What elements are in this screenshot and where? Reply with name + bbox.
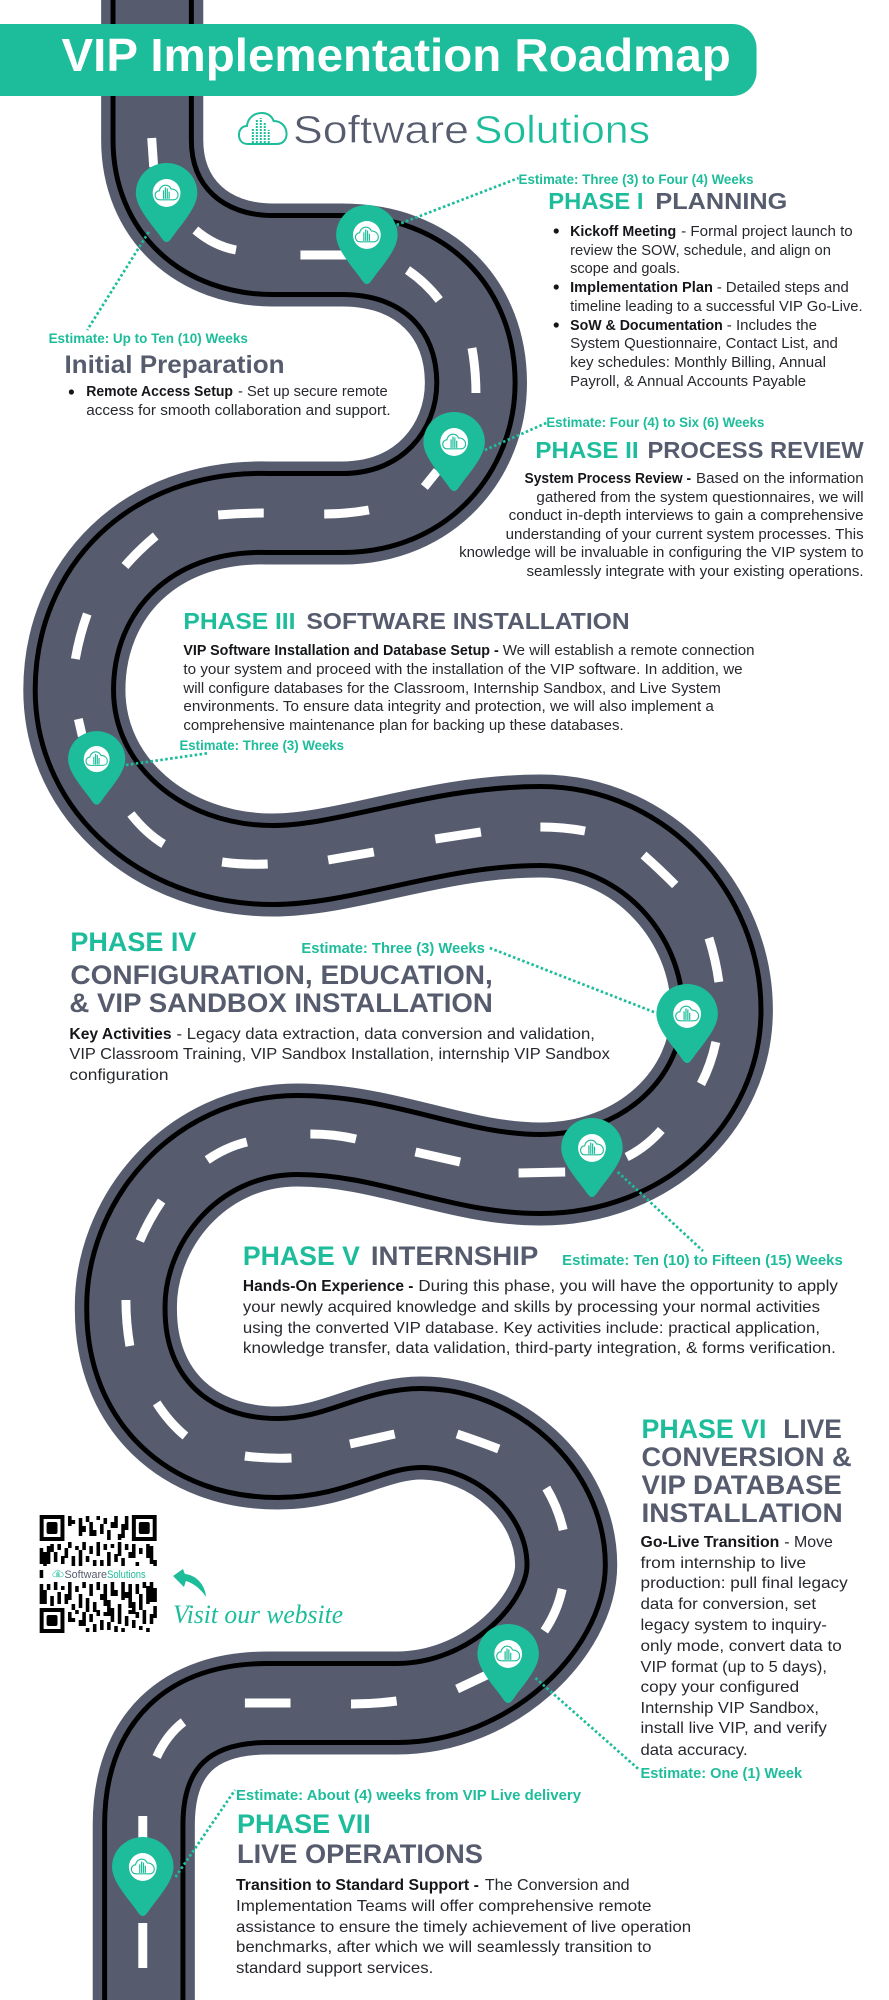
heading: phase VI: CONVERSION & <box>642 1442 852 1472</box>
initial preparation bullet <box>69 383 391 419</box>
map pin 7 <box>477 1624 539 1703</box>
phase IV body text: VIP Classroom Training, VIP Sandbox Installation, internship VIP Sandbox <box>69 1046 610 1063</box>
heading: phase I: PLANNING <box>655 188 787 214</box>
map pin 6 <box>561 1118 623 1197</box>
estimate: phase II: Estimate: Four (4) to Six (6) Weeks <box>546 414 765 430</box>
heading: phase VII: LIVE OPERATIONS <box>237 1839 483 1869</box>
phase VI body text: data accuracy. <box>641 1742 748 1759</box>
heading: phase VI: LIVE <box>783 1414 842 1444</box>
phase VI body text: from internship to live <box>641 1555 806 1572</box>
phase V body text: knowledge transfer, data validation, third-party integration, & forms verification. <box>243 1340 836 1357</box>
estimate: initial preparation: Estimate: Up to Ten (10) Weeks <box>49 330 248 346</box>
phase II body text <box>459 470 864 580</box>
map pin 3 <box>423 412 485 491</box>
phase I bullet list: Kickoff Meeting <box>570 223 676 240</box>
phase VI body text: production: pull final legacy <box>641 1575 848 1592</box>
phase I bullet list: System Questionnaire, Contact List, and <box>570 335 838 352</box>
phase IV body text: configuration <box>69 1067 169 1084</box>
phase I bullet list: key schedules: Monthly Billing, Annual <box>570 354 826 371</box>
heading: phase III: SOFTWARE INSTALLATION <box>306 608 630 634</box>
heading: phase I <box>548 188 787 214</box>
phase V body text: using the converted VIP database. Key activities include: practical application, <box>243 1320 820 1337</box>
panel: phase IV configuration <box>69 927 610 1084</box>
arrow: points to QR code <box>173 1569 206 1597</box>
phase I bullet list: - Formal project launch to <box>681 223 853 240</box>
estimate: phase III: Estimate: Three (3) Weeks <box>179 737 344 753</box>
map pin 2 <box>336 205 398 284</box>
logo: Software Solutions <box>239 109 650 152</box>
phase I bullet list: - Includes the <box>727 317 817 334</box>
panel: phase VI live conversion <box>641 1414 852 1782</box>
QR code: Solutions <box>107 1569 146 1581</box>
phase V body text: your newly acquired knowledge and skills by processing your normal activities <box>243 1299 820 1316</box>
estimate: phase IV: Estimate: Three (3) Weeks <box>301 940 485 957</box>
title banner <box>0 24 757 96</box>
heading: phase VI: PHASE VI <box>642 1414 766 1444</box>
heading: phase I: PHASE I <box>548 188 643 214</box>
phase VI body text: only mode, convert data to <box>641 1638 842 1655</box>
map pin 5 <box>656 984 718 1063</box>
map pin 8 <box>112 1837 174 1916</box>
logo: Software Solutions: Solutions <box>474 109 650 152</box>
phase I bullet list: scope and goals. <box>570 260 680 277</box>
phase I bullet list: timeline leading to a successful VIP Go-Live. <box>570 298 863 315</box>
road <box>74 0 722 2000</box>
heading: phase IV: & VIP SANDBOX INSTALLATION <box>69 988 493 1018</box>
heading: phase II <box>535 437 864 463</box>
panel: phase V internship <box>243 1241 843 1357</box>
initial preparation bullet: access for smooth collaboration and support. <box>86 402 391 419</box>
phase VII body text: assistance to ensure the timely achievement of live operation <box>236 1919 691 1936</box>
phase I bullet list: SoW & Documentation <box>570 317 723 334</box>
phase VI body text: Go-Live Transition <box>641 1534 779 1551</box>
phase VI body text: - Move <box>784 1534 833 1551</box>
panel: phase VII live operations <box>236 1787 691 1977</box>
phase I bullet list <box>554 223 863 390</box>
heading: phase VII: PHASE VII <box>237 1809 371 1839</box>
phase III body text: to your system and proceed with the installation of the VIP software. In addition, we <box>183 661 743 678</box>
QR code <box>40 1515 157 1633</box>
heading: phase VI: VIP DATABASE <box>642 1470 842 1500</box>
phase VI body text: Internship VIP Sandbox, <box>641 1700 819 1717</box>
phase I bullet list: - Detailed steps and <box>717 279 849 296</box>
heading: phase III <box>183 608 630 634</box>
phase V body text: Hands-On Experience - <box>243 1278 413 1295</box>
logo: Software Solutions: Software <box>293 109 469 152</box>
heading: phase V: PHASE V <box>243 1241 360 1271</box>
phase VII body text <box>236 1877 691 1977</box>
panel: phase I planning <box>519 171 863 390</box>
phase VI body text: copy your configured <box>641 1679 799 1696</box>
phase IV body text: - Legacy data extraction, data conversion and validation, <box>176 1026 595 1043</box>
initial preparation bullet: Remote Access Setup <box>86 383 233 400</box>
phase VII body text: Transition to Standard Support - <box>236 1877 479 1894</box>
phase VI body text: VIP format (up to 5 days), <box>641 1659 827 1676</box>
heading: phase VII <box>237 1809 483 1869</box>
phase III body text: We will establish a remote connection <box>503 642 755 659</box>
phase IV body text: Key Activities <box>69 1026 172 1043</box>
title banner: VIP Implementation Roadmap <box>61 30 731 81</box>
estimate: phase V: Estimate: Ten (10) to Fifteen (15) Weeks <box>562 1252 843 1269</box>
phase VI body text: install live VIP, and verify <box>641 1720 827 1737</box>
phase III body text: VIP Software Installation and Database Setup - <box>183 642 499 659</box>
estimate: phase VII: Estimate: About (4) weeks from VIP Live delivery <box>236 1787 582 1804</box>
heading: phase V <box>243 1241 538 1271</box>
phase II body text: gathered from the system questionnaires, we will <box>536 489 864 506</box>
map pin 1 <box>136 163 197 242</box>
phase II body text: understanding of your current system processes. This <box>506 526 864 543</box>
initial preparation bullet: - Set up secure remote <box>238 383 388 400</box>
panel: phase III software installation <box>179 608 755 753</box>
phase III body text: will configure databases for the Classroom, Internship Sandbox, and Live System <box>182 680 721 697</box>
heading: initial preparation: Initial Preparation <box>64 351 285 379</box>
phase VI body text: legacy system to inquiry- <box>641 1617 827 1634</box>
map pin 4 <box>68 731 125 805</box>
phase I bullet list: Implementation Plan <box>570 279 713 296</box>
dotted connector lines <box>87 178 703 1877</box>
phase II body text: conduct in-depth interviews to gain a comprehensive <box>509 507 864 524</box>
QR code: Software <box>64 1569 107 1581</box>
heading: phase V: INTERNSHIP <box>371 1241 538 1271</box>
phase VII body text: benchmarks, after which we will seamlessly transition to <box>236 1939 652 1956</box>
panel: initial preparation <box>49 330 391 419</box>
phase VI body text <box>641 1534 848 1759</box>
phase III body text <box>182 642 755 734</box>
phase VI body text: data for conversion, set <box>641 1596 817 1613</box>
call to action: visit our website: Visit our website <box>173 1600 343 1629</box>
heading: phase III: PHASE III <box>183 608 295 634</box>
phase II body text: seamlessly integrate with your existing operations. <box>526 563 864 580</box>
heading: phase II: PROCESS REVIEW <box>647 437 864 463</box>
phase II body text: Based on the information <box>696 470 864 487</box>
phase IV body text <box>69 1026 610 1084</box>
phase V body text <box>243 1278 838 1357</box>
phase V body text: During this phase, you will have the opportunity to apply <box>418 1278 838 1295</box>
phase III body text: comprehensive maintenance plan for backing up these databases. <box>183 717 624 734</box>
phase VII body text: standard support services. <box>236 1960 433 1977</box>
phase I bullet list: review the SOW, schedule, and align on <box>570 242 831 259</box>
heading: phase VI: INSTALLATION <box>642 1498 843 1528</box>
phase VII body text: The Conversion and <box>485 1877 630 1894</box>
heading: phase IV <box>69 927 493 1018</box>
phase VII body text: Implementation Teams will offer comprehensive remote <box>236 1898 652 1915</box>
phase I bullet list: Payroll, & Annual Accounts Payable <box>570 373 806 390</box>
phase II body text: System Process Review - <box>525 470 691 487</box>
phase III body text: environments. To ensure data integrity and protection, we will also implement a <box>183 698 715 715</box>
heading: phase II: PHASE II <box>535 437 639 463</box>
heading: phase IV: CONFIGURATION, EDUCATION, <box>70 960 493 990</box>
heading: phase IV: PHASE IV <box>70 927 196 957</box>
estimate: phase VI: Estimate: One (1) Week <box>641 1765 803 1782</box>
panel: phase II process review <box>459 414 864 580</box>
heading: phase VI <box>642 1414 852 1528</box>
phase II body text: knowledge will be invaluable in configuring the VIP system to <box>459 544 864 561</box>
estimate: phase I: Estimate: Three (3) to Four (4) Weeks <box>519 171 754 187</box>
